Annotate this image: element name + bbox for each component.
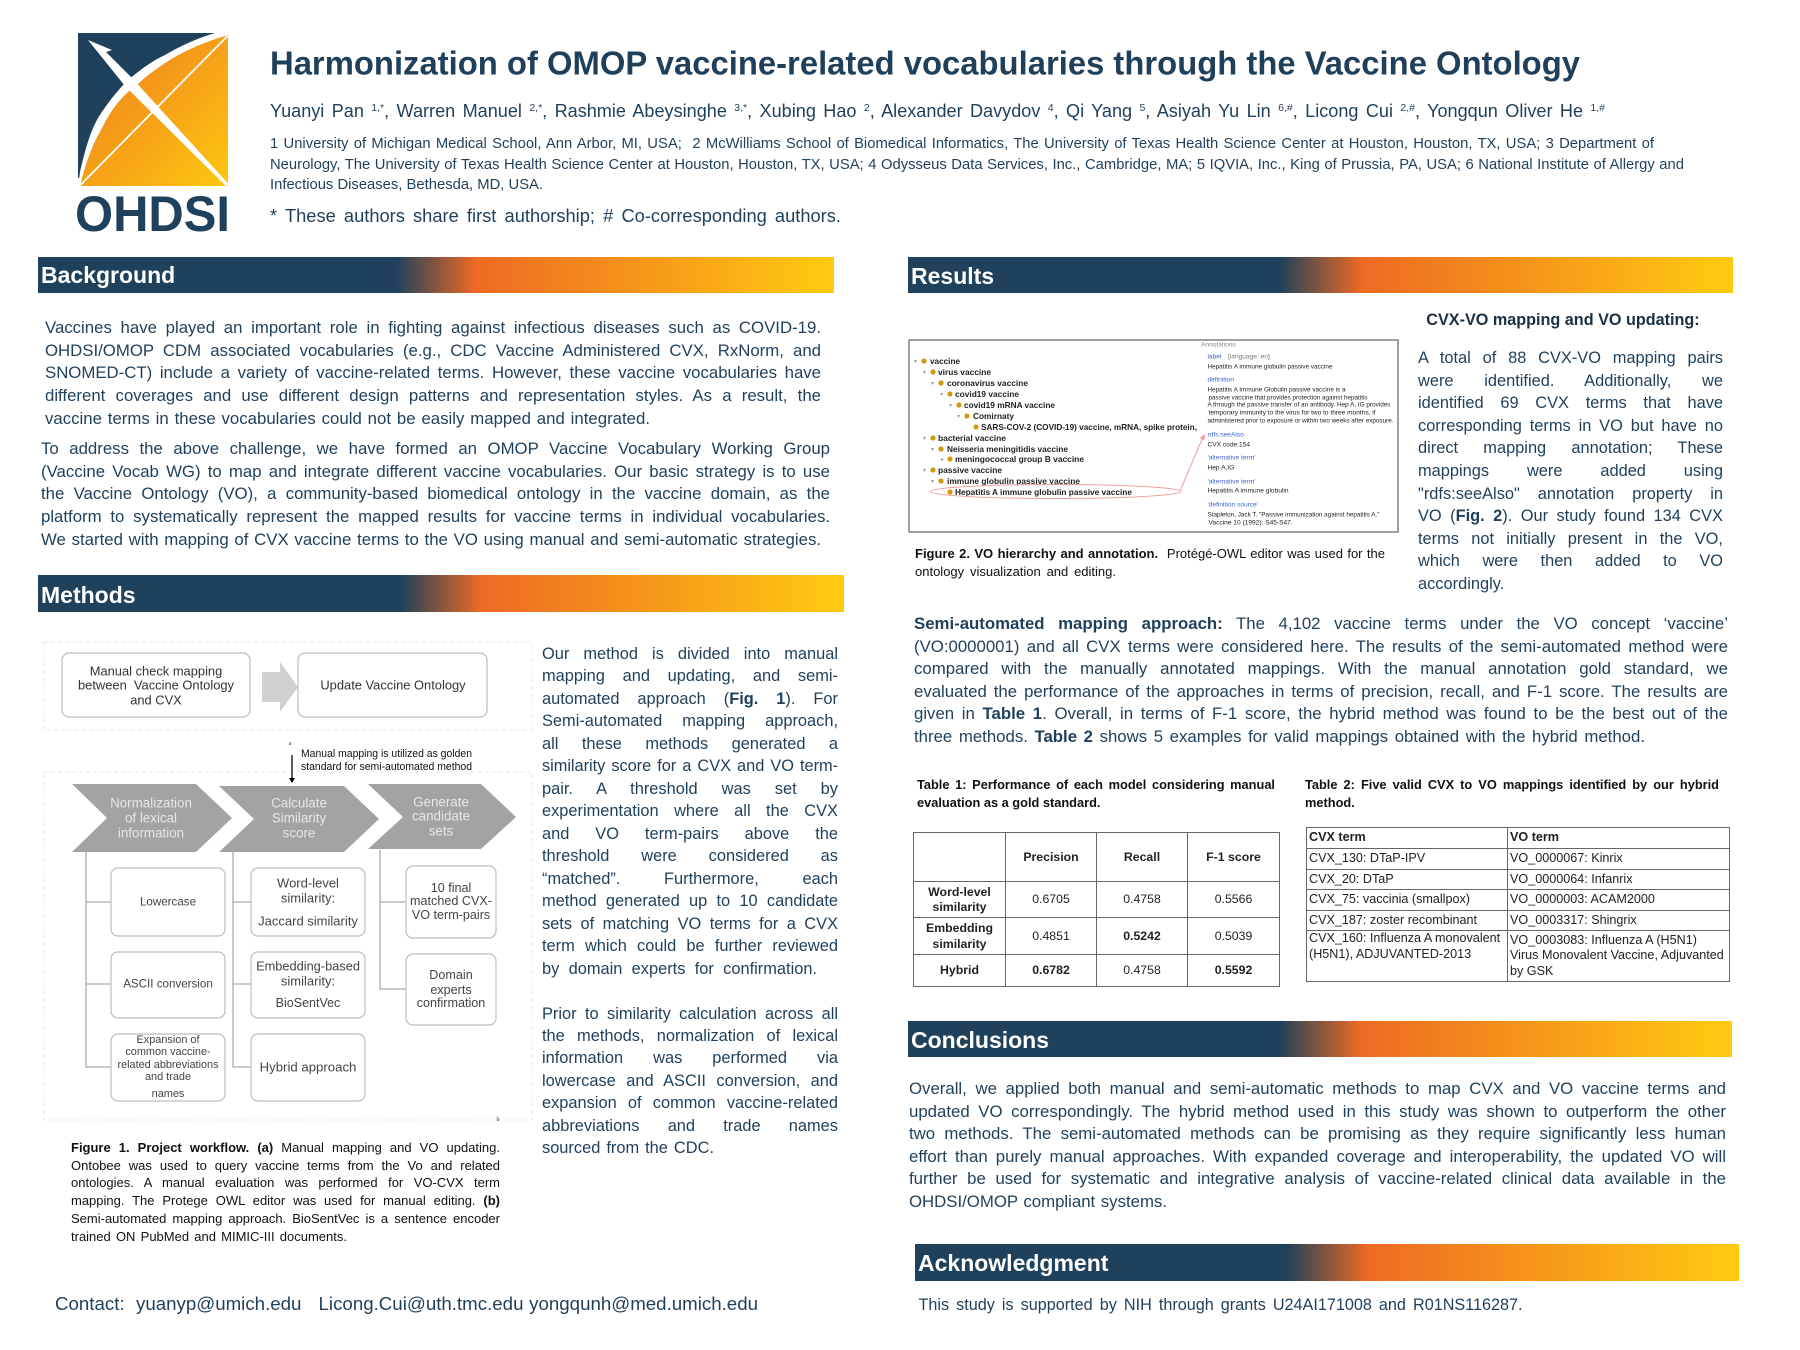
table 2: valid mappings: VO_0000003: ACAM2000 bbox=[1510, 892, 1655, 906]
annotations: Vaccine 10 (1992): S45-S47. bbox=[1208, 520, 1293, 526]
heading: Conclusions: Conclusions bbox=[911, 1027, 1049, 1053]
ontology tree: vaccine bbox=[930, 356, 960, 366]
text: background: vaccine terms in these vocabularies could not be easily mapped and integrated. bbox=[45, 409, 650, 428]
box: update vaccine ontology bbox=[298, 653, 487, 717]
figure 1 caption: Semi-automated mapping approach. BioSentVec is a sentence encoder bbox=[71, 1211, 500, 1226]
table 1: model performance: 0.5566 bbox=[1215, 892, 1252, 906]
table 1: model performance: Precision bbox=[1023, 850, 1079, 864]
text: methods: similarity score for a CVX and VO term- bbox=[542, 757, 838, 775]
table 1 caption: Table 1: Performance of each model considering manual bbox=[917, 777, 1275, 792]
table 2: valid mappings: VO_0000064: Infanrix bbox=[1510, 872, 1633, 886]
ontology tree: covid19 vaccine bbox=[955, 389, 1019, 399]
annotations: Stapleton, Jack T. "Passive immunization against hepatitis A." bbox=[1208, 512, 1380, 518]
annotations: Annotations bbox=[1201, 342, 1237, 348]
heading: Results bbox=[908, 257, 1733, 293]
note: golden standard bbox=[301, 748, 472, 773]
text: methods: mapping and updating, and semi- bbox=[542, 667, 838, 685]
annotations: rdfs:seeAlso bbox=[1208, 432, 1244, 438]
table 2: valid mappings: Virus Monovalent Vaccine, Adjuvanted bbox=[1510, 948, 1724, 962]
box: ascii bbox=[111, 952, 225, 1018]
text: CVX-VO mapping: corresponding terms in VO but have no bbox=[1418, 417, 1723, 435]
table 1: model performance: F-1 score bbox=[1206, 850, 1261, 864]
text: methods bbox=[542, 645, 838, 1157]
figure 1 caption: trained ON PubMed and MIMIC-III documents. bbox=[71, 1229, 347, 1244]
arrow: to update bbox=[262, 662, 298, 712]
heading: Background bbox=[38, 257, 834, 293]
table 2: valid mappings bbox=[1306, 827, 1730, 982]
ontology tree: meningococcal group B vaccine bbox=[955, 454, 1084, 464]
connectors bbox=[86, 850, 406, 1067]
annotations: definition bbox=[1208, 376, 1234, 384]
text: methods: threshold were considered as bbox=[542, 847, 838, 865]
chevron: normalization: of lexical bbox=[125, 810, 177, 826]
affiliations: 1 University of Michigan Medical School, Ann Arbor, MI, USA; 2 McWilliams School of Biomedical Informatics, The University of Texas Health Science Center at Houston, Houston, TX, USA; 3 Department of bbox=[270, 136, 1654, 152]
text: methods: by domain experts for confirmation. bbox=[542, 960, 817, 978]
box: domain experts: experts bbox=[430, 983, 472, 997]
text: background: the Vaccine Ontology (VO), a community-based biomedical ontology in the vaccine domain, as the bbox=[41, 484, 830, 503]
annotations: temporary immunity to the virus for two to three months, if bbox=[1208, 410, 1376, 416]
heading: Methods: Methods bbox=[41, 582, 136, 608]
table 2: valid mappings: (H5N1), ADJUVANTED-2013 bbox=[1309, 947, 1471, 961]
ontology tree: immune globulin passive vaccine bbox=[947, 476, 1080, 486]
chevron: calculate similarity: Similarity bbox=[272, 810, 326, 826]
text: background: SNOMED-CT) include a variety of vaccine-related terms. However, these vaccine vocabularies have bbox=[45, 363, 821, 382]
text: methods: sets of matching VO terms for a CVX bbox=[542, 915, 838, 933]
note: golden standard: Manual mapping is utilized as golden bbox=[301, 748, 472, 760]
table 2: valid mappings: VO term bbox=[1510, 830, 1559, 844]
box: lowercase: Lowercase bbox=[140, 896, 196, 908]
figure 1 caption: mapping. The Protege OWL editor was used for manual editing. (b) bbox=[71, 1193, 500, 1208]
chevron: calculate similarity: score bbox=[283, 826, 315, 840]
table 1: model performance: 0.5039 bbox=[1215, 929, 1252, 943]
text: methods: and VO term-pairs above the bbox=[542, 825, 838, 843]
box: expansion: names bbox=[152, 1088, 185, 1100]
table 2 caption: Table 2: Five valid CVX to VO mappings identified by our hybrid bbox=[1305, 777, 1719, 792]
annotations: [language: en] bbox=[1228, 354, 1270, 360]
box: embedding: similarity: bbox=[281, 974, 335, 988]
ontology tree: coronavirus vaccine bbox=[947, 378, 1028, 388]
table 2: valid mappings: VO_0003317: Shingrix bbox=[1510, 913, 1637, 927]
box: embedding: Embedding-based bbox=[256, 958, 360, 974]
text: CVX-VO mapping: "rdfs:seeAlso" annotation property in bbox=[1418, 485, 1723, 503]
text: background: platform to systematically represent the mapped results for vaccine terms in individual vocabularies. bbox=[41, 507, 830, 526]
annotations: 'alternative term' bbox=[1208, 454, 1255, 462]
chevron: generate candidates: sets bbox=[429, 824, 454, 838]
text: methods: method generated up to 10 candidate bbox=[542, 892, 838, 910]
table 1: model performance: Recall bbox=[1124, 850, 1160, 864]
text: CVX-VO mapping: direct mapping annotation; These bbox=[1418, 439, 1723, 457]
figure 2 caption bbox=[915, 546, 1385, 579]
box: domain experts bbox=[406, 954, 496, 1025]
box: embedding bbox=[251, 952, 365, 1018]
affiliations: Neurology, The University of Texas Health Science Center at Houston, Houston, TX, USA; 4 Odysseus Data Services, Inc., Cambridge, MA; 5 IQVIA, Inc., King of Prussia, PA, USA; 6 National Institute of Allergy and bbox=[270, 156, 1684, 172]
annotations: Hepatitis A Immune Globulin passive vaccine is a bbox=[1208, 386, 1346, 394]
arrow: golden standard bbox=[289, 755, 295, 783]
table 2: valid mappings: CVX_75: vaccinia (smallpox) bbox=[1309, 892, 1470, 906]
table 1: model performance: 0.5242 bbox=[1123, 929, 1161, 943]
table 2: valid mappings: VO_0003083: Influenza A (H5N1) bbox=[1510, 933, 1697, 947]
text: methods: expansion of common vaccine-related bbox=[542, 1094, 838, 1112]
chevron: generate candidates: candidate bbox=[412, 808, 470, 824]
heading: Methods bbox=[38, 575, 844, 612]
text: CVX-VO mapping: accordingly. bbox=[1418, 575, 1504, 593]
box: ascii: ASCII conversion bbox=[123, 978, 213, 990]
title: Harmonization of OMOP vaccine-related vocabularies through the Vaccine Ontology bbox=[270, 46, 1580, 82]
text: methods: abbreviations and trade names bbox=[542, 1117, 838, 1135]
text: methods: automated approach (Fig. 1). For bbox=[542, 690, 838, 708]
text: conclusions: Overall, we applied both manual and semi-automatic methods to map CVX and VO vaccine terms and bbox=[909, 1079, 1726, 1098]
table 1 caption bbox=[917, 777, 1275, 810]
chevron: calculate similarity bbox=[219, 786, 379, 852]
table 2: valid mappings: CVX_130: DTaP-IPV bbox=[1309, 851, 1425, 865]
text: acknowledgment: This study is supported by NIH through grants U24AI171008 and R01NS116287. bbox=[918, 1296, 1522, 1314]
text: semi-automated mapping: (VO:0000001) and all CVX terms were considered here. The results of the semi-automated method were bbox=[914, 637, 1728, 656]
figure 2: VO hierarchy screenshot bbox=[908, 339, 1399, 533]
annotations: passive vaccine that provides protection against hepatitis bbox=[1208, 394, 1368, 402]
text: CVX-VO mapping: terms not initially present in the VO, bbox=[1418, 530, 1723, 548]
chevron: generate candidates bbox=[368, 784, 516, 849]
table 2 caption bbox=[1305, 777, 1719, 810]
box: final pairs bbox=[406, 866, 496, 938]
box: expansion: common vaccine- bbox=[125, 1046, 211, 1058]
subheading: CVX-VO mapping: CVX-VO mapping and VO updating: bbox=[1426, 311, 1700, 329]
table 1: model performance: Hybrid bbox=[940, 963, 979, 977]
text: CVX-VO mapping bbox=[1418, 349, 1723, 593]
table 2: valid mappings: VO_0000067: Kinrix bbox=[1510, 851, 1623, 865]
chevron: normalization: Normalization bbox=[110, 796, 192, 810]
text: methods: Our method is divided into manual bbox=[542, 645, 838, 663]
box: expansion bbox=[111, 1034, 225, 1101]
text: CVX-VO mapping: were identified. Additionally, we bbox=[1418, 372, 1723, 390]
co-authorship note: * These authors share first authorship; # Co-corresponding authors. bbox=[270, 205, 841, 226]
text: methods: lowercase and ASCII conversion, and bbox=[542, 1072, 838, 1090]
text: methods: pair. A threshold was set by bbox=[542, 780, 838, 798]
text: conclusions bbox=[909, 1079, 1726, 1211]
text: semi-automated mapping: compared with the manually annotated mappings. With the manual annotation gold standard, we bbox=[914, 659, 1728, 678]
figure 1 caption: Figure 1. Project workflow. (a) Manual mapping and VO updating. bbox=[71, 1140, 500, 1155]
table 2: valid mappings: by GSK bbox=[1510, 964, 1553, 978]
figure 2 caption: Figure 2. VO hierarchy and annotation. Protégé-OWL editor was used for the bbox=[915, 546, 1385, 561]
ontology tree: Neisseria meningitidis vaccine bbox=[947, 444, 1068, 454]
box: word-level: similarity: bbox=[281, 890, 335, 906]
text: conclusions: effort than purely manual approaches. With expanded coverage and interoperability, the updated VO will bbox=[909, 1147, 1726, 1166]
annotations: 'alternative term' bbox=[1208, 478, 1255, 486]
text: background: We started with mapping of CVX vaccine terms to the VO using manual and semi-automatic strategies. bbox=[41, 530, 821, 549]
ontology tree bbox=[914, 356, 1197, 497]
text: conclusions: further be used for systematic and integrative analysis of vaccine-related clinical data available in the bbox=[909, 1169, 1726, 1188]
text: semi-automated mapping: Semi-automated mapping approach: The 4,102 vaccine terms under the VO concept ‘vaccine’ bbox=[914, 614, 1728, 633]
box: final pairs: 10 final bbox=[431, 881, 471, 895]
text: CVX-VO mapping: mappings were added using bbox=[1418, 462, 1723, 480]
annotations: A through the passive transfer of an antibody. Hep A, IG provides bbox=[1208, 402, 1391, 408]
box: expansion: and trade bbox=[145, 1071, 191, 1083]
box: hybrid: Hybrid approach bbox=[260, 1060, 356, 1074]
box: expansion: related abbreviations bbox=[117, 1059, 219, 1071]
figure 1 caption: ontologies. A manual evaluation was performed for VO-CVX term bbox=[71, 1175, 500, 1190]
chevron: normalization: information bbox=[118, 826, 184, 840]
text: CVX-VO mapping: which were then added to VO bbox=[1418, 552, 1723, 570]
text: semi-automated mapping bbox=[914, 614, 1728, 746]
box: hybrid bbox=[251, 1034, 365, 1101]
text: semi-automated mapping: given in Table 1. Overall, in terms of F-1 score, the hybrid method was found to be the best out of the bbox=[914, 704, 1728, 723]
text: CVX-VO mapping: identified 69 CVX terms that have bbox=[1418, 394, 1723, 412]
text: background: Vaccines have played an important role in fighting against infectious diseases such as COVID-19. bbox=[45, 318, 821, 337]
box: word-level: Word-level bbox=[277, 876, 339, 890]
box: domain experts: Domain bbox=[429, 968, 473, 982]
table 2 caption: method. bbox=[1305, 795, 1355, 810]
text: methods: Semi-automated mapping approach, bbox=[542, 712, 838, 730]
text: CVX-VO mapping: A total of 88 CVX-VO mapping pairs bbox=[1418, 349, 1723, 367]
table 1: model performance: 0.6705 bbox=[1032, 892, 1070, 906]
ontology tree: SARS-COV-2 (COVID-19) vaccine, mRNA, spike protein, bbox=[981, 422, 1197, 432]
ontology tree: covid19 mRNA vaccine bbox=[964, 400, 1055, 410]
text: methods: experimentation where all the CVX bbox=[542, 802, 838, 820]
box: manual check mapping: between Vaccine Ontology bbox=[78, 678, 235, 692]
table 2: valid mappings: CVX_20: DTaP bbox=[1309, 872, 1394, 886]
text: methods: all these methods generated a bbox=[542, 735, 838, 753]
text: methods: “matched”. Furthermore, each bbox=[542, 870, 838, 888]
text: conclusions: updated VO correspondingly. The hybrid method used in this study was shown to outperform the other bbox=[909, 1102, 1726, 1121]
box: manual check mapping bbox=[62, 653, 250, 717]
figure 1 caption bbox=[71, 1140, 500, 1244]
annotations bbox=[1201, 342, 1394, 526]
affiliations: Infectious Diseases, Bethesda, MD, USA. bbox=[270, 177, 543, 193]
text: methods: information was performed via bbox=[542, 1049, 838, 1067]
chevron: normalization bbox=[72, 784, 232, 852]
ontology tree: passive vaccine bbox=[938, 465, 1002, 475]
table 2: valid mappings: CVX term bbox=[1309, 830, 1366, 844]
box: manual check mapping: and CVX bbox=[130, 692, 182, 708]
text: semi-automated mapping: evaluated the performance of the approaches in terms of precision, recall, and F-1 score. The results are bbox=[914, 682, 1728, 701]
contact: Contact: yuanyp@umich.edu Licong.Cui@uth.tmc.edu yongqunh@med.umich.edu bbox=[55, 1293, 758, 1314]
table 1: model performance: 0.4758 bbox=[1123, 963, 1161, 977]
chevron: calculate similarity: Calculate bbox=[271, 796, 327, 810]
table 2: valid mappings: CVX_187: zoster recombinant bbox=[1309, 913, 1477, 927]
annotations: Hepatitis A immune globulin bbox=[1208, 488, 1289, 494]
heading: Acknowledgment bbox=[915, 1244, 1739, 1281]
figure 2 caption: ontology visualization and editing. bbox=[915, 564, 1116, 579]
text: background: OHDSI/OMOP CDM associated vocabularies (e.g., CDC Vaccine Administered CVX, RxNorm, and bbox=[45, 341, 821, 360]
text: methods: term which could be further reviewed bbox=[542, 937, 838, 955]
box: final pairs: matched CVX- bbox=[410, 894, 492, 908]
ontology tree: Comirnaty bbox=[973, 411, 1014, 421]
heading: Results: Results bbox=[911, 263, 994, 289]
heading: Acknowledgment: Acknowledgment bbox=[918, 1250, 1108, 1276]
text: methods: the methods, normalization of lexical bbox=[542, 1027, 838, 1045]
text: background bbox=[41, 318, 830, 549]
highlight ellipse and arrow bbox=[930, 435, 1204, 498]
text: background: different coverages and use different design patterns and representation styles. As a result, the bbox=[45, 386, 821, 405]
annotations: administered prior to exposure or within two weeks after exposure. bbox=[1208, 418, 1394, 424]
table 1 caption: evaluation as a gold standard. bbox=[917, 795, 1100, 810]
box: word-level bbox=[251, 868, 365, 936]
table 1: model performance: 0.6782 bbox=[1032, 963, 1070, 977]
heading: Conclusions bbox=[908, 1021, 1732, 1057]
text: conclusions: two methods. The semi-automated methods can be promising as they require significantly less human bbox=[909, 1124, 1726, 1143]
panel label b: b bbox=[496, 1117, 500, 1123]
table 1: model performance: 0.4758 bbox=[1123, 892, 1161, 906]
heading: Background: Background bbox=[41, 262, 175, 288]
box: word-level: Jaccard similarity bbox=[258, 914, 358, 928]
affiliations bbox=[270, 136, 1684, 193]
panel label a: a bbox=[289, 741, 292, 747]
ontology tree: Hepatitis A immune globulin passive vaccine bbox=[955, 487, 1132, 497]
box: domain experts: confirmation bbox=[417, 996, 485, 1010]
text: background: (Vaccine Vocab WG) to map and integrate different vaccine vocabularies. Our basic strategy is to use bbox=[41, 462, 830, 481]
table 1: model performance: 0.5592 bbox=[1215, 963, 1252, 977]
table 1: model performance bbox=[913, 832, 1280, 987]
note: golden standard: standard for semi-automated method bbox=[301, 761, 472, 773]
text: conclusions: OHDSI/OMOP compliant systems. bbox=[909, 1192, 1167, 1211]
table 2: valid mappings: CVX_160: Influenza A monovalent bbox=[1309, 931, 1500, 945]
text: CVX-VO mapping: VO (Fig. 2). Our study found 134 CVX bbox=[1418, 507, 1723, 525]
annotations: 'definition source' bbox=[1208, 502, 1258, 508]
table 1: model performance: Embedding similarity bbox=[926, 921, 993, 950]
logo: OHDSI bbox=[75, 33, 230, 238]
ontology tree: bacterial vaccine bbox=[938, 433, 1006, 443]
text: semi-automated mapping: three methods. Table 2 shows 5 examples for valid mappings obtained with the hybrid method. bbox=[914, 727, 1645, 746]
authors: Yuanyi Pan 1,*, Warren Manuel 2,*, Rashmie Abeysinghe 3,*, Xubing Hao 2, Alexander Davydov 4, Qi Yang 5, Asiyah Yu Lin 6,#, Licong Cui 2,#, Yongqun Oliver He 1,# bbox=[270, 101, 1605, 121]
annotations: Hep A,IG bbox=[1208, 464, 1234, 472]
box: embedding: BioSentVec bbox=[276, 996, 340, 1010]
box: lowercase bbox=[111, 868, 225, 936]
figure 1: project workflow diagram bbox=[44, 642, 532, 1123]
text: background: To address the above challenge, we have formed an OMOP Vaccine Vocabulary Working Group bbox=[41, 439, 830, 458]
ontology tree: virus vaccine bbox=[938, 367, 991, 377]
table 1: model performance: 0.4851 bbox=[1032, 929, 1070, 943]
annotations: label bbox=[1208, 354, 1222, 360]
chevron: generate candidates: Generate bbox=[413, 794, 469, 810]
text: methods: sourced from the CDC. bbox=[542, 1139, 714, 1157]
table 1: model performance: Word-level similarity bbox=[928, 884, 991, 914]
annotations: Hepatitis A immune globulin passive vaccine bbox=[1208, 364, 1333, 370]
box: expansion: Expansion of bbox=[137, 1034, 200, 1046]
box: update vaccine ontology: Update Vaccine Ontology bbox=[320, 678, 466, 692]
text: methods: Prior to similarity calculation across all bbox=[542, 1004, 838, 1022]
figure 1 caption: Ontobee was used to query vaccine terms from the Vo and related bbox=[71, 1158, 500, 1173]
annotations: CVX code:154 bbox=[1208, 442, 1250, 448]
box: manual check mapping: Manual check mapping bbox=[90, 664, 222, 678]
box: final pairs: VO term-pairs bbox=[412, 908, 490, 922]
